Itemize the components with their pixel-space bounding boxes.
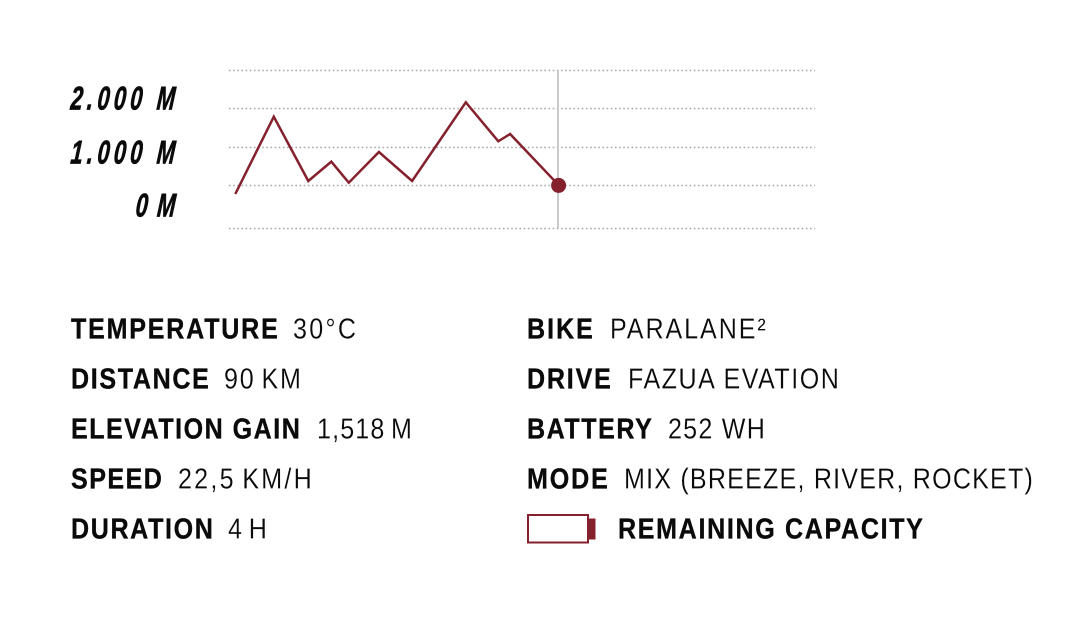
- mode: MIX (BREEZE, RIVER, ROCKET): [624, 463, 1033, 495]
- drive: FAZUA EVATION: [628, 363, 839, 395]
- elevation gain: 1,518 M: [317, 413, 412, 445]
- y axis labels: [69, 80, 178, 224]
- elevation gain: [71, 413, 412, 445]
- speed: 22,5 KM/H: [178, 463, 312, 495]
- temperature: 30°C: [293, 313, 356, 345]
- duration: DURATION: [71, 513, 213, 545]
- elevation chart: [229, 70, 815, 228]
- icon: battery: [528, 515, 596, 542]
- current position dot: [551, 178, 566, 193]
- battery: [527, 413, 765, 445]
- right stats column: [527, 313, 1033, 545]
- y axis labels: 0 M: [134, 187, 178, 224]
- bike: BIKE: [527, 313, 593, 345]
- remaining capacity label: REMAINING CAPACITY: [618, 513, 923, 545]
- y axis labels: 1.000 M: [69, 134, 177, 171]
- elevation profile line: [235, 102, 559, 194]
- battery: 252 WH: [668, 413, 765, 445]
- temperature: TEMPERATURE: [71, 313, 278, 345]
- elevation gain: ELEVATION GAIN: [71, 413, 300, 445]
- y axis labels: 2.000 M: [69, 80, 177, 117]
- duration: 4 H: [228, 513, 267, 545]
- drive: DRIVE: [527, 363, 611, 395]
- speed: SPEED: [71, 463, 162, 495]
- position marker line: [557, 70, 559, 228]
- distance: 90 KM: [224, 363, 301, 395]
- left stats column: [71, 313, 412, 545]
- bike: [527, 313, 766, 345]
- distance: [71, 363, 301, 395]
- distance: DISTANCE: [71, 363, 209, 395]
- speed: [71, 463, 312, 495]
- bike: PARALANE²: [610, 313, 766, 345]
- battery: BATTERY: [527, 413, 652, 445]
- drive: [527, 363, 839, 395]
- mode: MODE: [527, 463, 608, 495]
